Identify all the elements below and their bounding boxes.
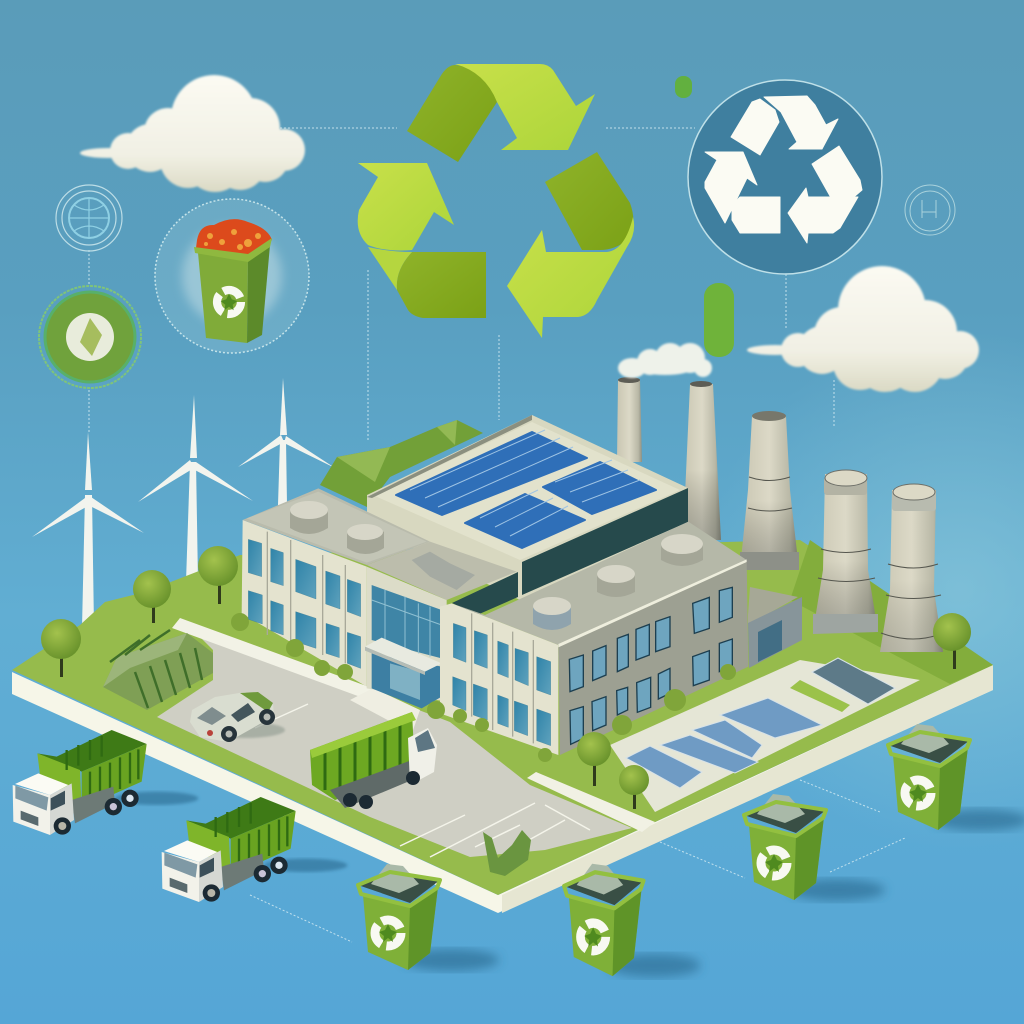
smoke: [618, 343, 712, 378]
car: [190, 692, 285, 742]
turbine 2: [138, 395, 253, 582]
cloud: upper left: [80, 75, 305, 192]
roof solar panel: [396, 430, 656, 548]
arrow: right: [507, 152, 634, 338]
truck: on road: [310, 712, 437, 809]
chimney 2: [683, 381, 721, 540]
arrow: top: [407, 64, 595, 162]
side windows: [569, 587, 732, 744]
paved lot with ground panels: [610, 658, 920, 812]
icon: small outlined circle right: [905, 185, 955, 235]
factory building: [242, 415, 802, 755]
bin 2: [564, 864, 701, 977]
turbine 3: [238, 378, 335, 505]
icon: globe circle: [56, 185, 122, 251]
distant green hill: [320, 420, 483, 507]
bin 4: [888, 724, 1024, 831]
chimney 4: [813, 470, 878, 634]
red contents: [196, 219, 272, 256]
icon: bin with red contents in circle: [155, 199, 309, 353]
trees: [41, 546, 971, 677]
left wing windows: [248, 539, 361, 668]
recycling badge: [688, 80, 882, 274]
cloud: right: [747, 266, 979, 392]
platform: [12, 540, 993, 913]
chimney 1: [617, 377, 642, 462]
dotted connector lines: [89, 128, 905, 942]
chimneys: [617, 377, 943, 652]
bin body: [198, 253, 248, 343]
bin 1: [358, 864, 499, 971]
turbine 1: [32, 432, 144, 628]
wind turbines: [32, 378, 335, 628]
parking and road: [157, 618, 655, 857]
bushes and front trees: [231, 613, 736, 876]
chimney 5: [880, 484, 943, 652]
truck: center left: [162, 797, 347, 902]
white recycling symbol: [705, 96, 862, 243]
arrow: left: [358, 163, 486, 318]
green hedge structure: [103, 630, 213, 710]
truck: left: [13, 730, 198, 835]
right wing: [440, 522, 748, 755]
upper block: [367, 415, 688, 615]
icon: green pill: [704, 283, 734, 357]
icon: small green dot: [675, 76, 692, 98]
left wing: [242, 488, 517, 708]
ground solar panels: [626, 658, 895, 788]
right wing windows: [453, 623, 551, 746]
chimney 3: [740, 411, 799, 570]
bin 3: [744, 794, 885, 901]
recycling bins: [358, 724, 1024, 977]
large green recycling symbol: [358, 64, 634, 338]
icon: green leaf circle: [39, 286, 141, 388]
roof vents: [290, 501, 703, 630]
center entrance: [365, 542, 517, 708]
annex: [748, 587, 802, 668]
